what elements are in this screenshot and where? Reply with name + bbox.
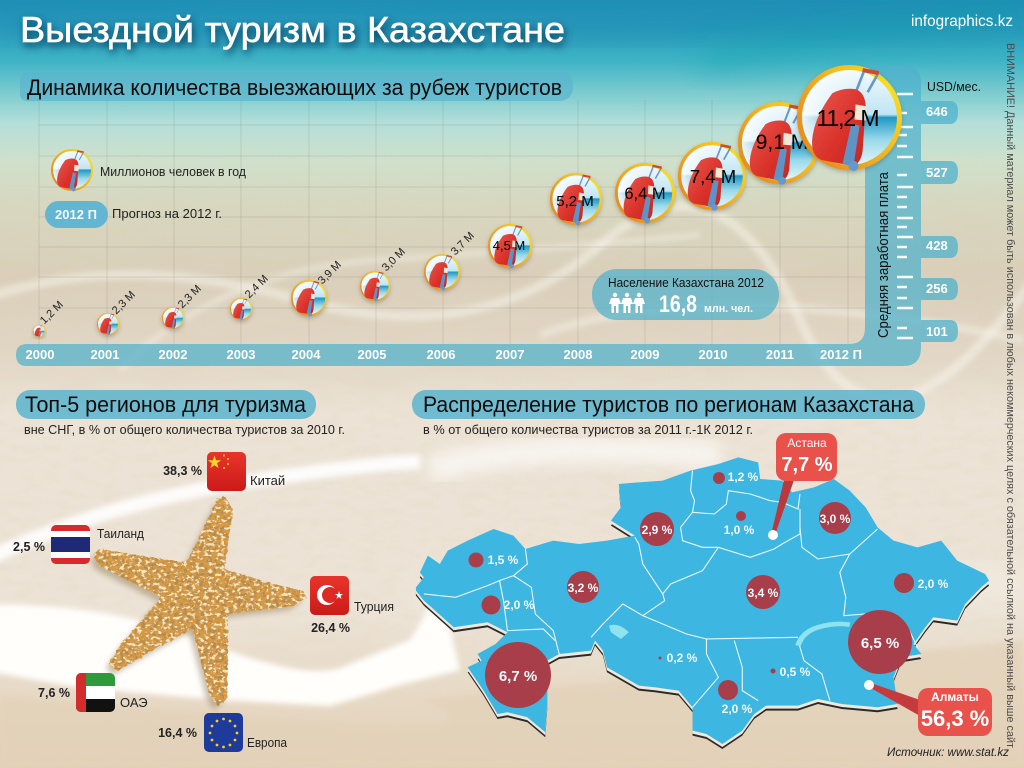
bubble chart: tourists by year bbox=[33, 68, 899, 337]
year labels: 2012 П bbox=[820, 347, 862, 362]
year labels bbox=[26, 347, 862, 362]
callout: Astana: 7,7 % bbox=[781, 454, 833, 476]
population callout bbox=[592, 269, 779, 320]
label: EU: 16,4 % bbox=[158, 726, 197, 740]
salary axis labels: 428 bbox=[926, 238, 948, 253]
flag: Turkey bbox=[310, 576, 349, 615]
year labels: 2006 bbox=[427, 347, 455, 362]
salary axis labels: 101 bbox=[926, 324, 948, 339]
salary scale ticks bbox=[897, 94, 913, 338]
label: UAE: 7,6 % bbox=[38, 686, 70, 700]
label: Thailand bbox=[13, 526, 144, 554]
label: China: 38,3 % bbox=[163, 464, 202, 478]
salary axis labels: Средняя заработная плата bbox=[875, 171, 892, 338]
region labels: 3,4 % bbox=[748, 586, 779, 600]
heading: top-5: Топ-5 регионов для туризма bbox=[25, 392, 307, 417]
region bubbles bbox=[468, 472, 914, 708]
population callout: Население Казахстана 2012 bbox=[608, 276, 764, 290]
2002 bubble: 2,3 М bbox=[176, 283, 204, 311]
legend: suitcase: Миллионов человек в год bbox=[100, 165, 247, 179]
region labels: 1,2 % bbox=[728, 470, 759, 484]
region labels: 0,2 % bbox=[667, 651, 698, 665]
2010 bubble: 7,4 М bbox=[690, 166, 736, 187]
2005 bubble bbox=[361, 246, 408, 301]
2009 bubble: 6,4 М bbox=[624, 185, 666, 203]
2009 bubble bbox=[616, 164, 674, 224]
salary axis labels: 646 bbox=[926, 104, 948, 119]
flag: Thailand bbox=[51, 525, 90, 564]
icon: people bbox=[609, 293, 645, 313]
title: Выездной туризм в Казахстане bbox=[20, 9, 565, 50]
map of Kazakhstan bbox=[416, 457, 989, 749]
legend: forecast bbox=[45, 201, 222, 228]
region labels: 1,0 % bbox=[724, 523, 755, 537]
2007 bubble: 4,5 М bbox=[493, 238, 525, 253]
year labels: 2007 bbox=[496, 347, 524, 362]
flag: China bbox=[207, 452, 246, 491]
2001 bubble bbox=[98, 289, 138, 335]
site name: infographics.kz bbox=[911, 13, 1013, 30]
2012 bubble: 11,2 М bbox=[816, 105, 880, 131]
region labels: 6,7 % bbox=[499, 668, 537, 685]
year labels: 2009 bbox=[631, 347, 659, 362]
region labels: 6,5 % bbox=[861, 635, 899, 652]
label: Thailand: Таиланд bbox=[97, 526, 144, 541]
2006 bubble: 3,7 М bbox=[449, 230, 477, 258]
flag: UAE bbox=[76, 673, 115, 712]
year labels: 2004 bbox=[292, 347, 321, 362]
region labels: 2,0 % bbox=[722, 702, 753, 716]
region labels: 3,2 % bbox=[568, 581, 599, 595]
subtitle: top-5: вне СНГ, в % от общего количества туристов за 2010 г. bbox=[24, 423, 345, 437]
2012 bubble bbox=[800, 68, 899, 171]
flag: EU bbox=[204, 713, 243, 752]
2004 bubble bbox=[292, 259, 344, 316]
region labels: 2,0 % bbox=[918, 577, 949, 591]
year labels: 2010 bbox=[699, 347, 727, 362]
year labels: 2002 bbox=[159, 347, 187, 362]
2011 bubble bbox=[740, 104, 818, 185]
year labels: 2003 bbox=[227, 347, 255, 362]
population callout: млн. чел. bbox=[704, 303, 753, 315]
label: China bbox=[163, 464, 285, 488]
2002 bubble bbox=[163, 283, 204, 329]
2006 bubble bbox=[425, 230, 477, 290]
year labels: 2000 bbox=[26, 347, 54, 362]
2001 bubble: 2,3 М bbox=[110, 289, 138, 317]
region labels: 0,5 % bbox=[780, 665, 811, 679]
salary axis labels: 256 bbox=[926, 281, 948, 296]
region labels: 2,9 % bbox=[642, 523, 673, 537]
heading: regions: Распределение туристов по регионам Казахстана bbox=[423, 392, 915, 417]
2008 bubble: 5,2 М bbox=[556, 193, 594, 210]
legend: forecast: Прогноз на 2012 г. bbox=[112, 207, 222, 221]
2008 bubble bbox=[551, 174, 601, 226]
year labels: 2008 bbox=[564, 347, 592, 362]
region labels bbox=[488, 470, 949, 716]
callout: Astana: Астана bbox=[787, 436, 827, 450]
heading: dynamics: Динамика количества выезжающих за рубеж туристов bbox=[27, 75, 562, 100]
label: China: Китай bbox=[250, 473, 285, 488]
2010 bubble bbox=[680, 144, 744, 211]
label: UAE bbox=[38, 686, 148, 710]
label: EU bbox=[158, 726, 288, 750]
2005 bubble: 3,0 М bbox=[380, 246, 408, 274]
panel: axis bar and salary column bbox=[16, 65, 921, 366]
population callout: 16,8 bbox=[659, 291, 697, 318]
region labels: 1,5 % bbox=[488, 553, 519, 567]
2000 bubble bbox=[33, 299, 66, 337]
label: UAE: ОАЭ bbox=[120, 695, 148, 710]
label: EU: Европа bbox=[247, 735, 288, 750]
source: Источник: www.stat.kz bbox=[887, 745, 1009, 759]
callout: Almaty: Алматы bbox=[931, 690, 979, 704]
2003 bubble bbox=[231, 273, 271, 320]
2003 bubble: 2,4 М bbox=[243, 273, 271, 301]
subtitle: regions: в % от общего количества туристов за 2011 г.-1К 2012 г. bbox=[423, 423, 753, 437]
salary tabs bbox=[921, 101, 958, 342]
callout: Astana bbox=[768, 433, 837, 540]
starfish bbox=[90, 498, 305, 710]
2000 bubble: 1,2 М bbox=[38, 299, 66, 327]
year labels: 2011 bbox=[766, 347, 794, 362]
2011 bubble: 9,1 М bbox=[756, 131, 808, 154]
grid lines bbox=[39, 100, 865, 344]
vertical notice: ВНИМАНИЕ! Данный материал может быть использован в любых некоммерческих целях с обязательной ссылкой на указанный выше сайт bbox=[1004, 43, 1016, 748]
salary axis labels: USD/мес. bbox=[927, 79, 981, 94]
callout: Almaty bbox=[864, 680, 992, 736]
label: Turkey: Турция bbox=[354, 599, 394, 614]
callout: Almaty: 56,3 % bbox=[921, 706, 989, 731]
salary axis labels: 527 bbox=[926, 165, 948, 180]
salary axis labels bbox=[875, 79, 981, 339]
2004 bubble: 3,9 М bbox=[316, 259, 344, 287]
region labels: 3,0 % bbox=[820, 512, 851, 526]
label: Turkey: 26,4 % bbox=[311, 621, 350, 635]
region labels: 2,0 % bbox=[504, 598, 535, 612]
label: Thailand: 2,5 % bbox=[13, 540, 45, 554]
2007 bubble bbox=[489, 225, 531, 268]
year labels: 2005 bbox=[358, 347, 386, 362]
label: Turkey bbox=[311, 599, 394, 635]
legend: suitcase bbox=[52, 150, 247, 191]
year labels: 2001 bbox=[91, 347, 119, 362]
legend: forecast: 2012 П bbox=[55, 207, 97, 222]
